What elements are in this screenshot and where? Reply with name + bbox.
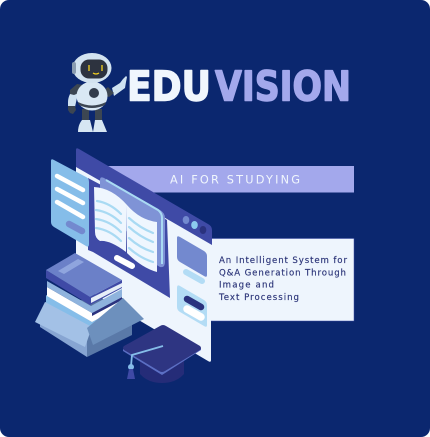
text lines on pages — [96, 201, 153, 262]
robot left arm — [68, 93, 78, 107]
sidebar button card — [177, 285, 207, 327]
cap base — [140, 358, 184, 383]
content panel — [88, 178, 170, 298]
robot body — [76, 82, 108, 110]
books stack — [46, 253, 122, 331]
right page — [127, 205, 157, 272]
sidebar pill — [186, 272, 202, 281]
description text: Text Processing — [218, 293, 299, 303]
white pill — [117, 258, 132, 266]
description text: Q&A Generation Through — [219, 268, 346, 278]
box front left — [40, 322, 87, 357]
icon: box of books — [35, 253, 144, 357]
box back — [45, 298, 132, 335]
tassel cord — [131, 346, 163, 366]
logo: VISION: VISION — [215, 62, 351, 110]
robot right arm — [112, 76, 127, 96]
robot legs — [82, 109, 89, 123]
description text — [218, 256, 347, 303]
icon: graduation cap — [123, 325, 201, 383]
description text: An Intelligent System for — [219, 256, 347, 266]
tablet frame — [100, 177, 165, 267]
description panel — [200, 238, 354, 321]
box right flap — [87, 298, 144, 345]
sidebar image card — [177, 236, 207, 277]
cap board edge — [123, 348, 201, 375]
illustration: open book — [94, 177, 165, 272]
window body — [76, 165, 211, 362]
top book — [46, 270, 92, 305]
illustration: browser window — [76, 148, 212, 362]
tassel — [127, 369, 135, 379]
box left flap — [35, 302, 92, 347]
banner: AI for studying: AI FOR STUDYING — [170, 174, 300, 186]
robot head — [72, 53, 112, 83]
left page — [94, 187, 127, 252]
icon: robot mascot — [68, 53, 127, 132]
lower books — [46, 295, 122, 331]
floating note card — [51, 159, 89, 247]
description text: Image and — [219, 280, 274, 290]
logo: EDU: EDU — [127, 62, 211, 110]
logo wordmark — [127, 62, 351, 110]
box right face — [87, 318, 132, 357]
banner: AI for studying — [100, 166, 354, 192]
cap board — [123, 325, 201, 372]
window title bar — [76, 148, 212, 245]
window control dots — [183, 216, 206, 234]
